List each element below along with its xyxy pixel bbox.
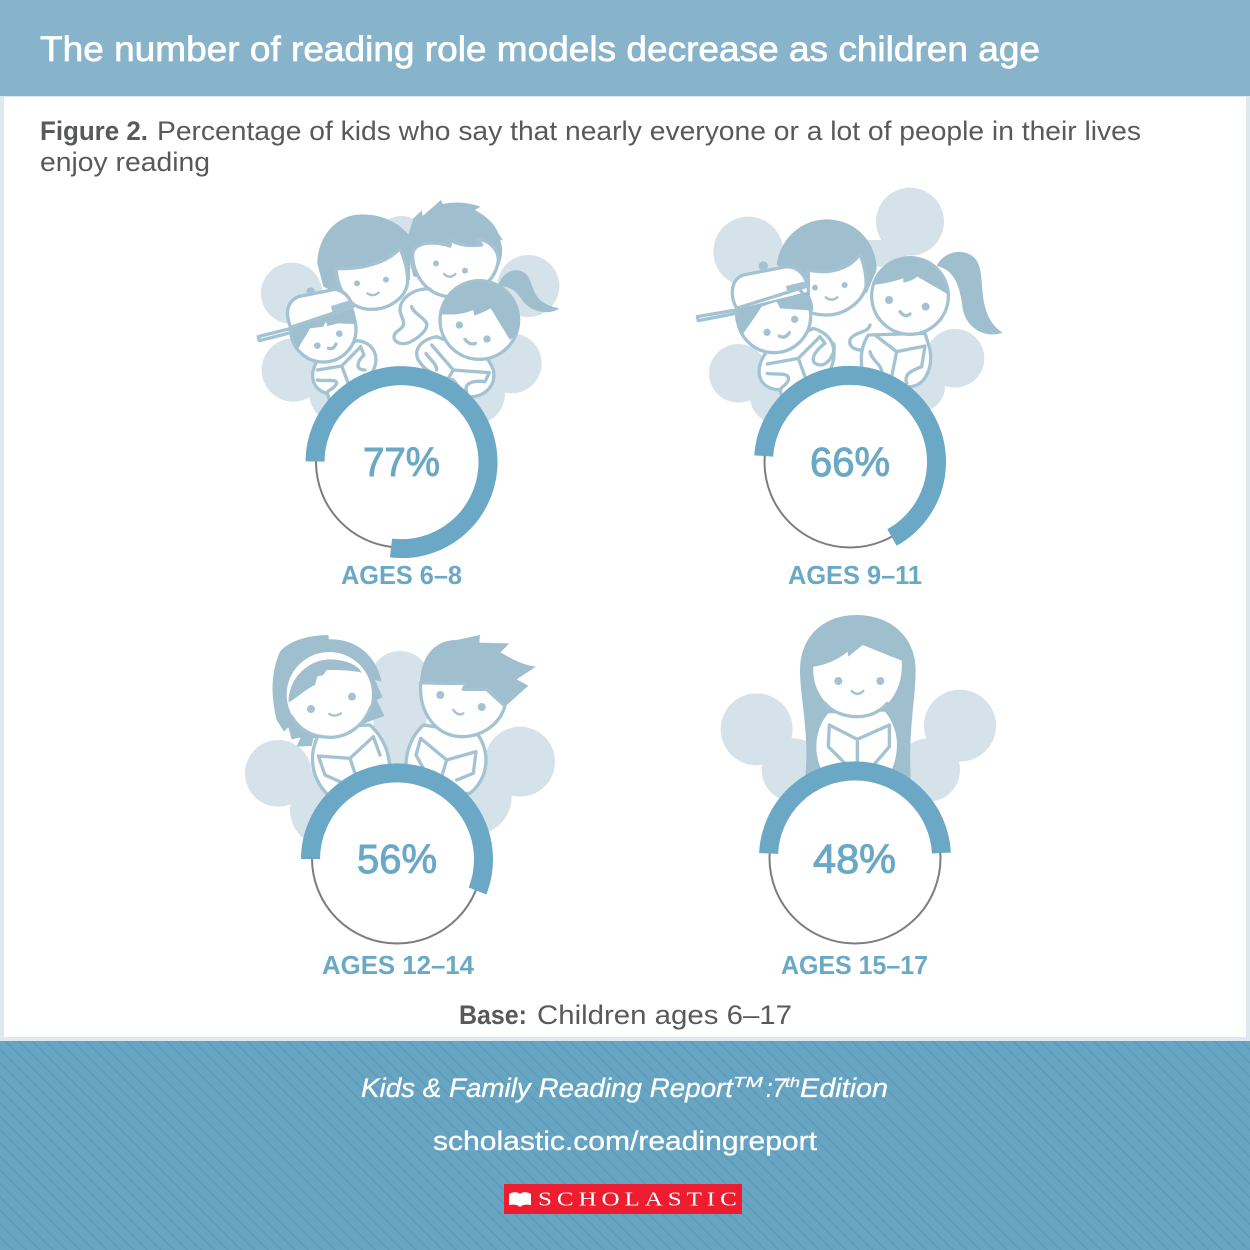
ring chart: 77%: 77% (363, 439, 440, 485)
report title: :7 (766, 1073, 787, 1103)
scholastic logo (504, 1184, 742, 1214)
panel: white content area (4, 97, 1246, 1037)
base note: Base: (459, 1000, 527, 1030)
figure caption: Figure 2. (40, 116, 148, 146)
scholastic logo: SCHOLASTIC (538, 1188, 737, 1210)
ring chart: 66%: 66% (810, 439, 890, 485)
header band (0, 0, 1250, 96)
title: The number of reading role models decrease as children age (40, 30, 1040, 69)
illustration: ages 15-17 girl (721, 615, 996, 802)
ring chart: 56%: 56% (357, 836, 437, 882)
label: ages 6-8: AGES 6–8 (341, 560, 462, 590)
report title: Edition (800, 1073, 888, 1103)
ring chart: 56% (310, 773, 483, 944)
icon: open book (509, 1192, 531, 1207)
report url: scholastic.com/readingreport (433, 1126, 818, 1156)
report title (361, 1073, 888, 1103)
figure caption (40, 116, 1141, 177)
report title: Kids & Family Reading Report (361, 1073, 735, 1103)
label: ages 15-17: AGES 15–17 (781, 950, 928, 980)
illustration: ages 6-8 children (258, 200, 559, 425)
figure caption: enjoy reading (40, 147, 210, 177)
figure caption: Percentage of kids who say that nearly everyone or a lot of people in their lives (157, 116, 1141, 146)
label: ages 12-14: AGES 12–14 (322, 950, 475, 980)
report title: TM (733, 1074, 764, 1091)
illustration: ages 9-11 children (697, 188, 1003, 423)
base note: Children ages 6–17 (537, 1000, 792, 1030)
ring chart: 48% (769, 771, 941, 944)
ring chart: 48%: 48% (813, 836, 896, 882)
report title: th (785, 1074, 800, 1090)
ring chart: 77% (315, 376, 488, 549)
label: ages 9-11: AGES 9–11 (788, 560, 922, 590)
illustration: ages 12-14 children (245, 635, 555, 847)
ring chart: 66% (764, 375, 936, 548)
footer band (0, 1041, 1250, 1250)
